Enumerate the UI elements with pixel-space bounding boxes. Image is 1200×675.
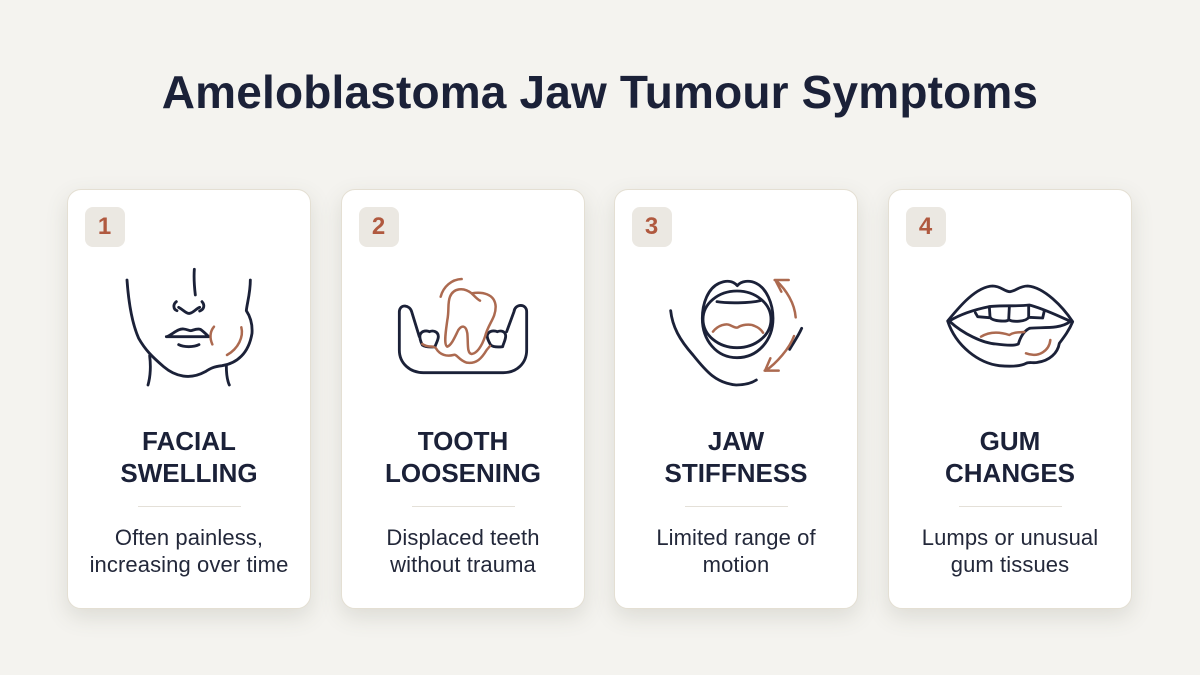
description xyxy=(656,525,816,577)
heading: JAW xyxy=(708,426,764,456)
heading: TOOTH xyxy=(418,426,508,456)
number badge 3: 3 xyxy=(645,213,658,240)
title: Ameloblastoma Jaw Tumour Symptoms xyxy=(162,66,1038,118)
description xyxy=(922,525,1098,577)
number badge 1 xyxy=(85,207,125,247)
heading xyxy=(120,426,258,488)
icon: swollen face xyxy=(127,269,252,385)
number badge 4: 4 xyxy=(919,213,932,240)
number badge 2 xyxy=(359,207,399,247)
panel: facial swelling xyxy=(67,189,311,609)
heading: CHANGES xyxy=(945,458,1075,488)
heading: GUM xyxy=(980,426,1040,456)
description: Often painless, xyxy=(115,525,263,550)
heading xyxy=(945,426,1075,488)
description: increasing over time xyxy=(90,552,288,577)
icon: loose tooth in jaw xyxy=(399,279,527,373)
arrow: downward xyxy=(765,336,794,371)
icon: open mouth with arrows xyxy=(671,280,802,385)
panel: tooth loosening xyxy=(341,189,585,609)
icon: lips with gum lump xyxy=(948,286,1073,366)
arrow: upward xyxy=(775,280,796,317)
heading: LOOSENING xyxy=(385,458,541,488)
description: Lumps or unusual xyxy=(922,525,1098,550)
number badge 3 xyxy=(632,207,672,247)
description: Displaced teeth xyxy=(386,525,540,550)
heading: SWELLING xyxy=(120,458,258,488)
description: motion xyxy=(703,552,769,577)
heading: STIFFNESS xyxy=(664,458,808,488)
heading: FACIAL xyxy=(142,426,236,456)
number badge 2: 2 xyxy=(372,213,385,240)
description: gum tissues xyxy=(951,552,1069,577)
description xyxy=(386,525,540,577)
heading xyxy=(385,426,541,488)
panel: jaw stiffness xyxy=(614,189,858,609)
description: without trauma xyxy=(390,552,536,577)
description xyxy=(90,525,288,577)
number badge 4 xyxy=(906,207,946,247)
panel: gum changes xyxy=(888,189,1132,609)
description: Limited range of xyxy=(656,525,816,550)
number badge 1: 1 xyxy=(98,213,111,240)
heading xyxy=(664,426,808,488)
